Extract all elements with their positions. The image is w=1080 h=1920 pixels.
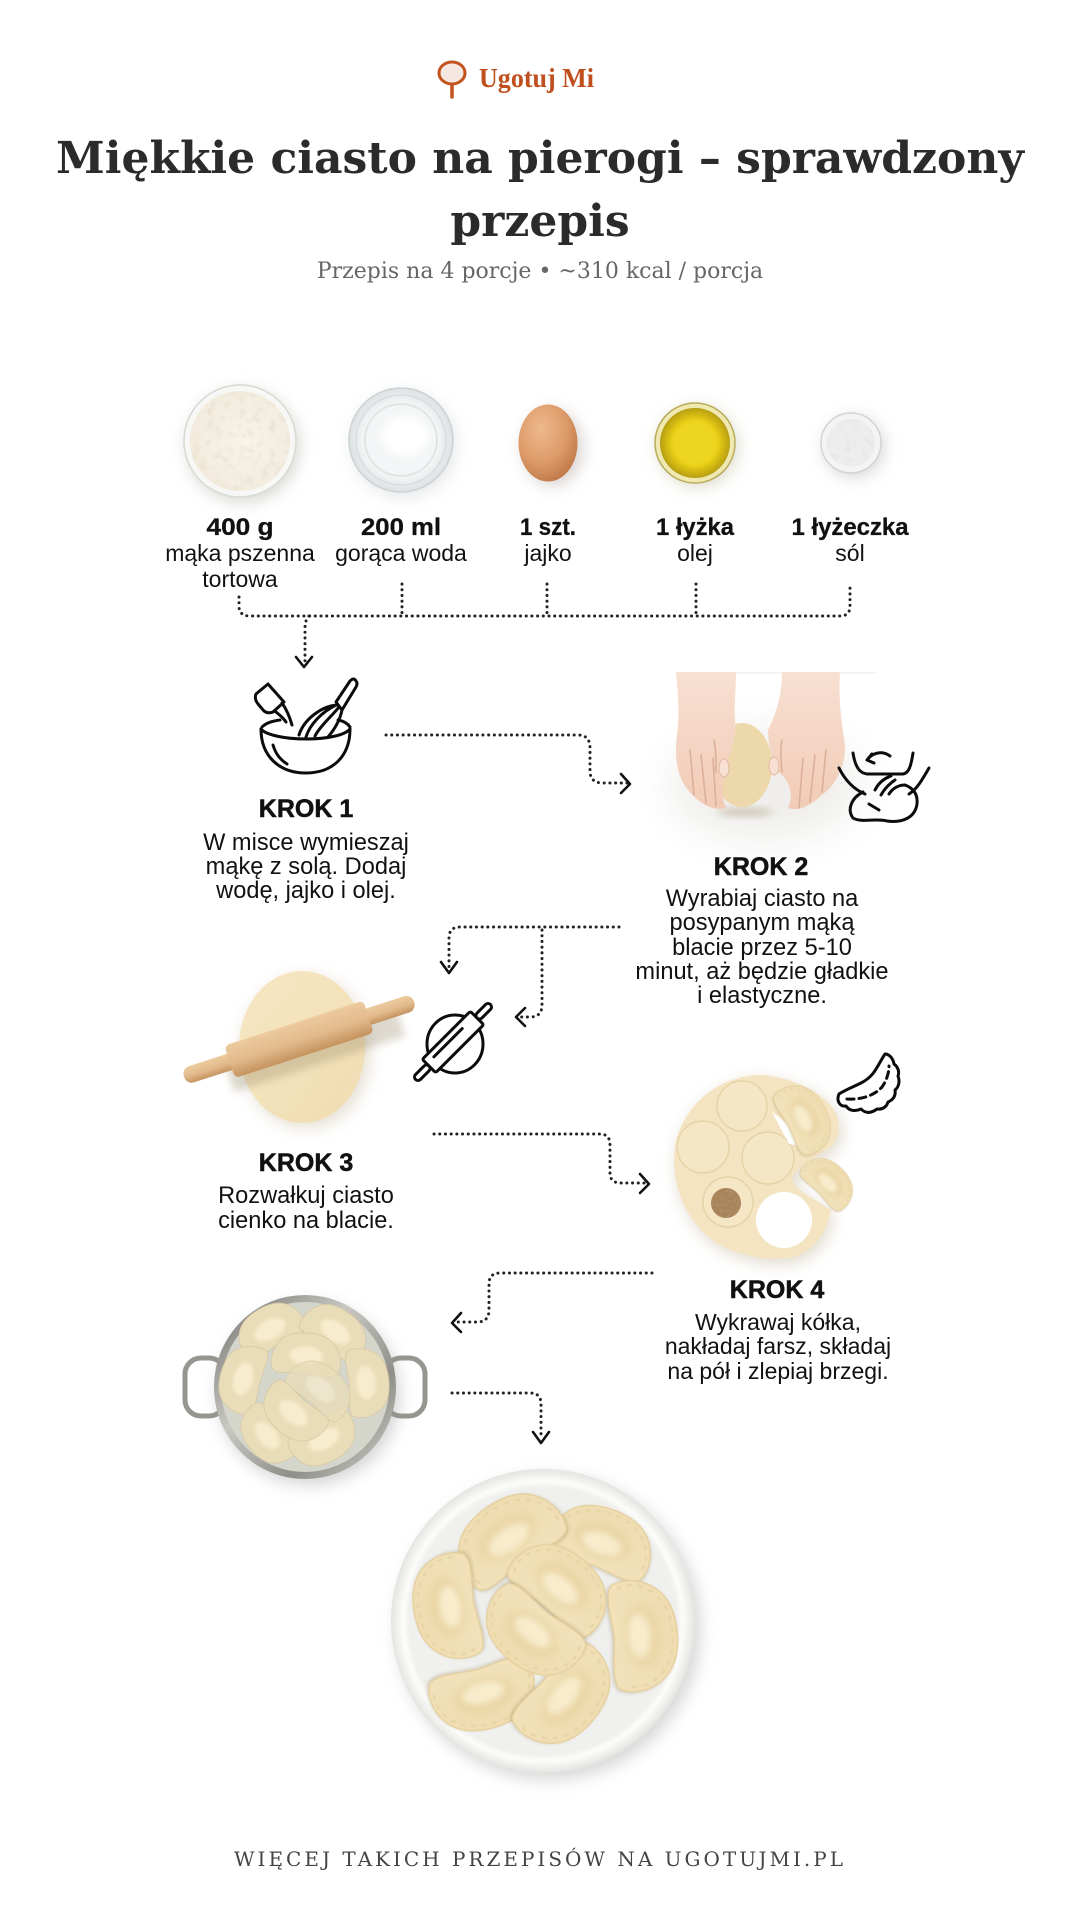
ingredient: flour: mąka pszenna	[165, 540, 315, 566]
ingredient: egg: jajko	[523, 540, 572, 566]
ingredient: egg: 1 szt.	[520, 514, 576, 541]
description: W misce wymieszaj	[203, 830, 409, 856]
icon: pieróg	[838, 1054, 899, 1112]
ingredient: water: 200 ml	[361, 514, 441, 541]
ingredient: flour: tortowa	[202, 566, 278, 592]
arrow: step 4 to boiling	[452, 1273, 652, 1332]
ingredient: egg	[518, 404, 582, 566]
description: i elastyczne.	[697, 983, 827, 1009]
icon: spoon	[439, 62, 465, 97]
description: wodę, jajko i olej.	[215, 878, 396, 904]
description: posypanym mąką	[670, 910, 855, 936]
subtitle: Przepis na 4 porcje • ~310 kcal / porcja	[317, 259, 763, 284]
photo: pot with boiling pierogi	[185, 1292, 425, 1485]
logo: Ugotuj Mi	[439, 62, 594, 97]
panel: ingredients	[165, 385, 909, 592]
ingredient: oil: olej	[677, 540, 713, 566]
panel: step 3	[179, 971, 497, 1234]
ingredient: water	[335, 388, 467, 566]
panel: step 1	[203, 679, 409, 904]
ingredient: flour	[165, 385, 315, 592]
ingredient: water: gorąca woda	[335, 540, 467, 566]
ingredient: salt	[792, 413, 909, 566]
icon: kneading hands	[839, 753, 929, 821]
ingredient: flour: 400 g	[206, 514, 274, 541]
description: mąkę z solą. Dodaj	[206, 854, 406, 880]
arrow: step 1 to step 2	[386, 735, 630, 793]
photo: plate with pierogi	[391, 1469, 701, 1780]
ingredient: salt: sól	[835, 540, 865, 566]
arrow: step 3 to step 4	[434, 1134, 649, 1193]
photo: dough with cut circles and pierogi	[674, 1075, 863, 1264]
description: cienko na blacie.	[218, 1208, 394, 1234]
description: minut, aż będzie gładkie	[635, 959, 889, 985]
arrow: ingredients connector to step 1	[239, 584, 850, 667]
ingredient: salt: 1 łyżeczka	[792, 514, 909, 541]
photo: hands kneading dough	[670, 672, 876, 840]
ingredient: oil: 1 łyżka	[656, 514, 735, 541]
description: Wykrawaj kółka,	[695, 1309, 861, 1335]
description: blacie przez 5-10	[672, 935, 852, 961]
description: Rozwałkuj ciasto	[218, 1183, 394, 1209]
ingredient: oil	[655, 403, 738, 566]
description: Wyrabiaj ciasto na	[666, 886, 859, 912]
panel: step 4	[665, 1054, 899, 1384]
title: Miękkie ciasto na pierogi – sprawdzony	[56, 133, 1025, 184]
heading: KROK 3	[259, 1149, 353, 1177]
icon: bowl, whisk and jug	[255, 679, 357, 773]
arrow: boiling to plate	[452, 1393, 549, 1443]
heading: KROK 2	[714, 853, 808, 881]
photo: rolling pin on dough	[179, 971, 423, 1128]
arrow: step 2 to step 3	[441, 927, 619, 1026]
heading: KROK 1	[259, 795, 353, 823]
description: na pół i zlepiaj brzegi.	[667, 1358, 889, 1384]
footer: WIĘCEJ TAKICH PRZEPISÓW NA UGOTUJMI.PL	[234, 1846, 846, 1871]
title: przepis	[450, 196, 630, 247]
description: nakładaj farsz, składaj	[665, 1333, 891, 1359]
brand name: Ugotuj Mi	[479, 63, 594, 93]
icon: rolling pin	[409, 998, 497, 1086]
heading: KROK 4	[730, 1276, 824, 1304]
panel: step 2	[635, 672, 929, 1009]
